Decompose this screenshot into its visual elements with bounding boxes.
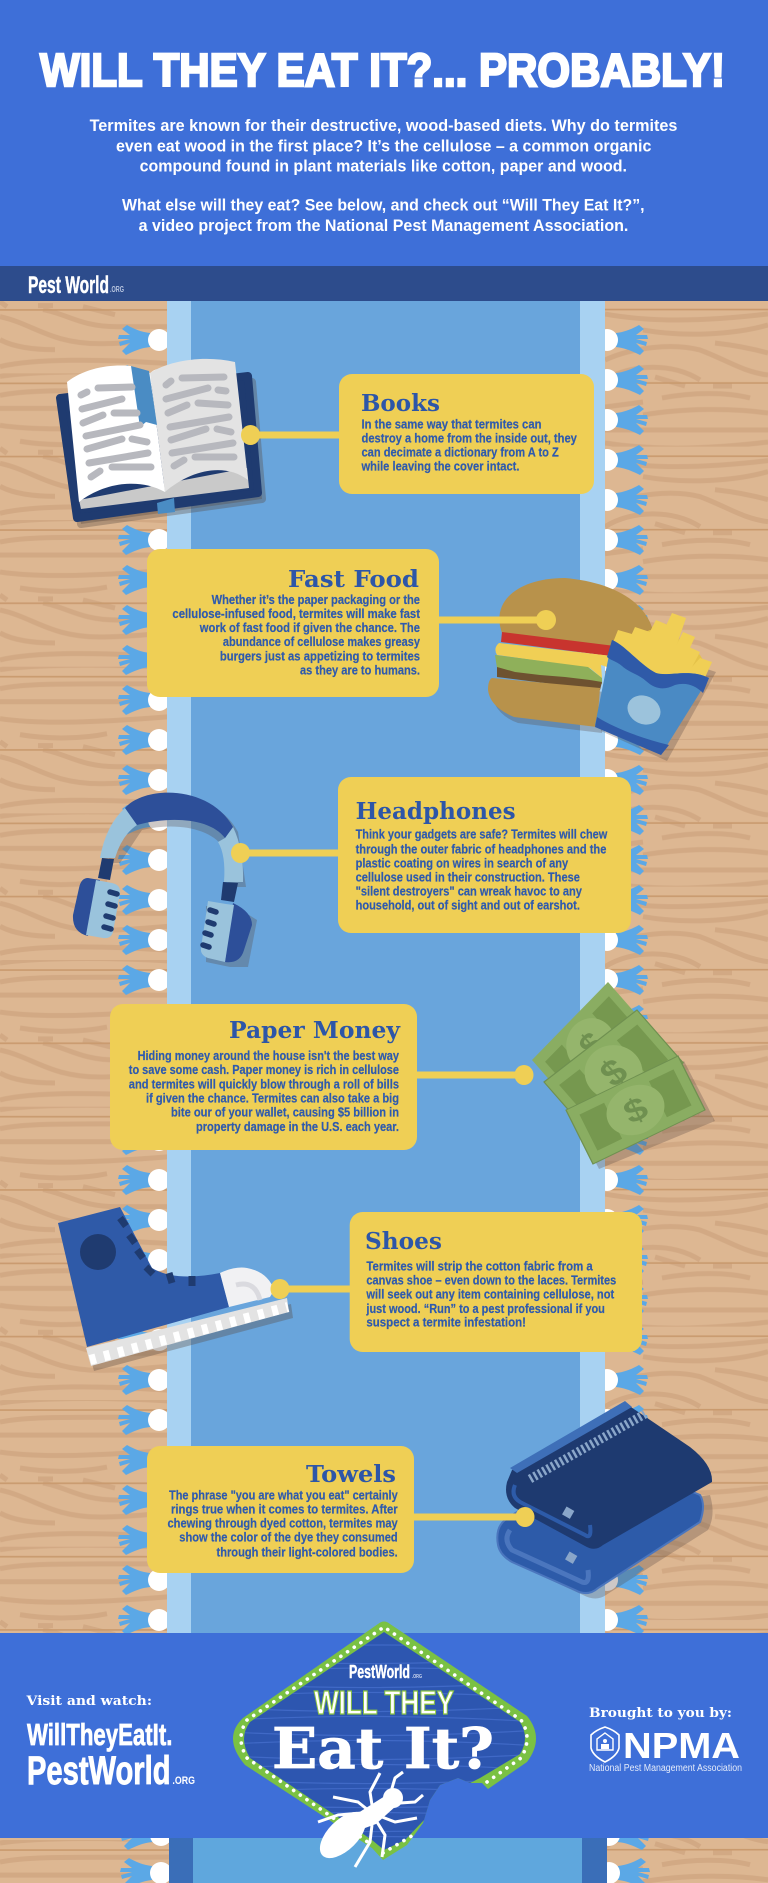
panel: shoes (350, 1212, 642, 1352)
text: headphones (356, 826, 608, 912)
icon: NPMA shield (591, 1727, 619, 1762)
text: paper money (129, 1048, 400, 1134)
text: fast food: burgers just as appetizing to termites (220, 648, 420, 664)
intro text (90, 116, 677, 235)
text: shoes (366, 1258, 616, 1330)
logo band (0, 266, 768, 301)
text: towels: through their light-colored bodies. (216, 1544, 398, 1560)
text: paper money: property damage in the U.S. each year. (196, 1119, 399, 1134)
text: fast food: Whether it’s the paper packaging or the (212, 592, 420, 607)
heading: paper money: Paper Money (229, 1017, 401, 1044)
text: headphones: through the outer fabric of headphones and the (356, 842, 606, 856)
text: towels: chewing through dyed cotton, termites may (168, 1516, 398, 1530)
intro text: a video project from the National Pest Management Association. (139, 216, 628, 235)
intro text: even eat wood in the first place? It’s the cellulose – a common organic (116, 137, 651, 156)
sign: will they eat it: PestWorld (349, 1662, 410, 1682)
text: towels: show the color of the dye they consumed (179, 1530, 398, 1544)
text: towels: The phrase "you are what you eat" certainly (169, 1488, 398, 1502)
connector: fast food (436, 610, 556, 630)
panel: headphones (338, 777, 631, 933)
connector: headphones (231, 843, 340, 863)
text: books: destroy a home from the inside out, they (362, 430, 578, 446)
heading: towels: Towels (306, 1461, 396, 1488)
icon: shoe (58, 1207, 293, 1371)
connector: paper money (414, 1065, 534, 1085)
footer: visit and watch (25, 1694, 195, 1793)
icon: paper money (532, 982, 715, 1169)
bill: back: $ (572, 1025, 611, 1067)
text: headphones: Think your gadgets are safe? Termites will chew (356, 826, 608, 842)
footer: brought to you by: NPMA (623, 1725, 740, 1766)
icon: burger and fries (488, 578, 716, 761)
footer: visit and watch: Visit and watch: (25, 1694, 152, 1709)
heading: headphones: Headphones (356, 798, 516, 825)
text: headphones: household, out of sight and out of earshot. (356, 898, 580, 912)
text: shoes: will seek out any item containing cellulose, not (366, 1286, 615, 1302)
panel: fast food (147, 549, 439, 697)
bill: back (532, 982, 650, 1108)
text: shoes: just wood. “Run” to a pest professional if you (366, 1301, 605, 1316)
text: shoes: canvas shoe – even down to the laces. Termites (366, 1272, 616, 1288)
text: paper money: and termites will quickly blow through a roll of bills (129, 1076, 399, 1092)
text: towels: rings true when it comes to termites. After (171, 1502, 398, 1516)
sign: will they eat it: .ORG (412, 1674, 422, 1680)
logo band: .ORG (110, 285, 124, 294)
title: WILL THEY EAT IT?... PROBABLY! (40, 44, 725, 96)
footer background (0, 1633, 768, 1838)
bill: middle (544, 1010, 683, 1135)
text: shoes: suspect a termite infestation! (366, 1314, 526, 1330)
text: fast food: abundance of cellulose makes greasy (223, 634, 421, 649)
icon: towels (497, 1401, 713, 1598)
heading: fast food: Fast Food (288, 566, 419, 593)
text: headphones: "silent destroyers" can wreak havoc to any (356, 884, 583, 898)
intro text: Termites are known for their destructive, wood-based diets. Why do termites (90, 116, 677, 135)
text: books: while leaving the cover intact. (361, 458, 520, 474)
sign: will they eat it: Eat It? (272, 1716, 494, 1782)
panel: towels (147, 1446, 414, 1573)
footer: visit and watch: .ORG (172, 1775, 195, 1787)
connector: books (241, 425, 342, 445)
heading: books: Books (361, 390, 440, 417)
text: books (361, 416, 578, 474)
header background (0, 0, 768, 266)
text: fast food: as they are to humans. (300, 662, 420, 678)
text: fast food (172, 592, 421, 678)
logo band: Pest World (28, 272, 109, 299)
sign: will they eat it: WILL THEY (314, 1684, 454, 1721)
connector: shoes (270, 1279, 352, 1299)
intro text: compound found in plant materials like cotton, paper and wood. (140, 157, 627, 176)
intro text: What else will they eat? See below, and check out “Will They Eat It?”, (122, 196, 645, 215)
icon: book (60, 359, 262, 524)
rug (167, 301, 607, 1883)
text: headphones: cellulose used in their construction. These (356, 870, 580, 884)
connector: towels (411, 1507, 534, 1527)
footer: brought to you by: National Pest Management Association (589, 1763, 742, 1774)
text: paper money: to save some cash. Paper money is rich in cellulose (129, 1062, 399, 1077)
bill: front (566, 1056, 705, 1164)
icon: headphones (73, 793, 257, 967)
panel: books (339, 374, 594, 494)
bill: middle: $ (591, 1050, 636, 1094)
text: paper money: if given the chance. Termites can also take a big (146, 1090, 399, 1106)
heading: shoes: Shoes (365, 1228, 442, 1255)
wood floor right (600, 301, 768, 1883)
wood floor left (0, 301, 170, 1883)
footer: brought to you by: Brought to you by: (589, 1706, 732, 1721)
text: fast food: cellulose-infused food, termites will make fast (172, 606, 421, 621)
footer: visit and watch: PestWorld (27, 1749, 170, 1793)
text: paper money: Hiding money around the house isn't the best way (138, 1048, 400, 1063)
text: paper money: bite our of your wallet, causing $5 billion in (171, 1104, 399, 1120)
text: books: In the same way that termites can (362, 416, 542, 432)
sign: will they eat it (230, 1622, 540, 1860)
bill: front: $ (617, 1089, 654, 1131)
text: books: can decimate a dictionary from A to Z (362, 444, 559, 460)
text: towels (168, 1488, 398, 1560)
text: fast food: work of fast food if given the chance. The (199, 620, 420, 635)
icon: termite (312, 1772, 423, 1867)
text: headphones: plastic coating on wires in search of any (356, 856, 569, 870)
rug tassels (118, 325, 650, 1883)
footer: brought to you by (589, 1706, 742, 1774)
panel: paper money (110, 1004, 417, 1150)
text: shoes: Termites will strip the cotton fabric from a (366, 1258, 593, 1274)
footer: visit and watch: WillTheyEatIt. (27, 1717, 172, 1752)
